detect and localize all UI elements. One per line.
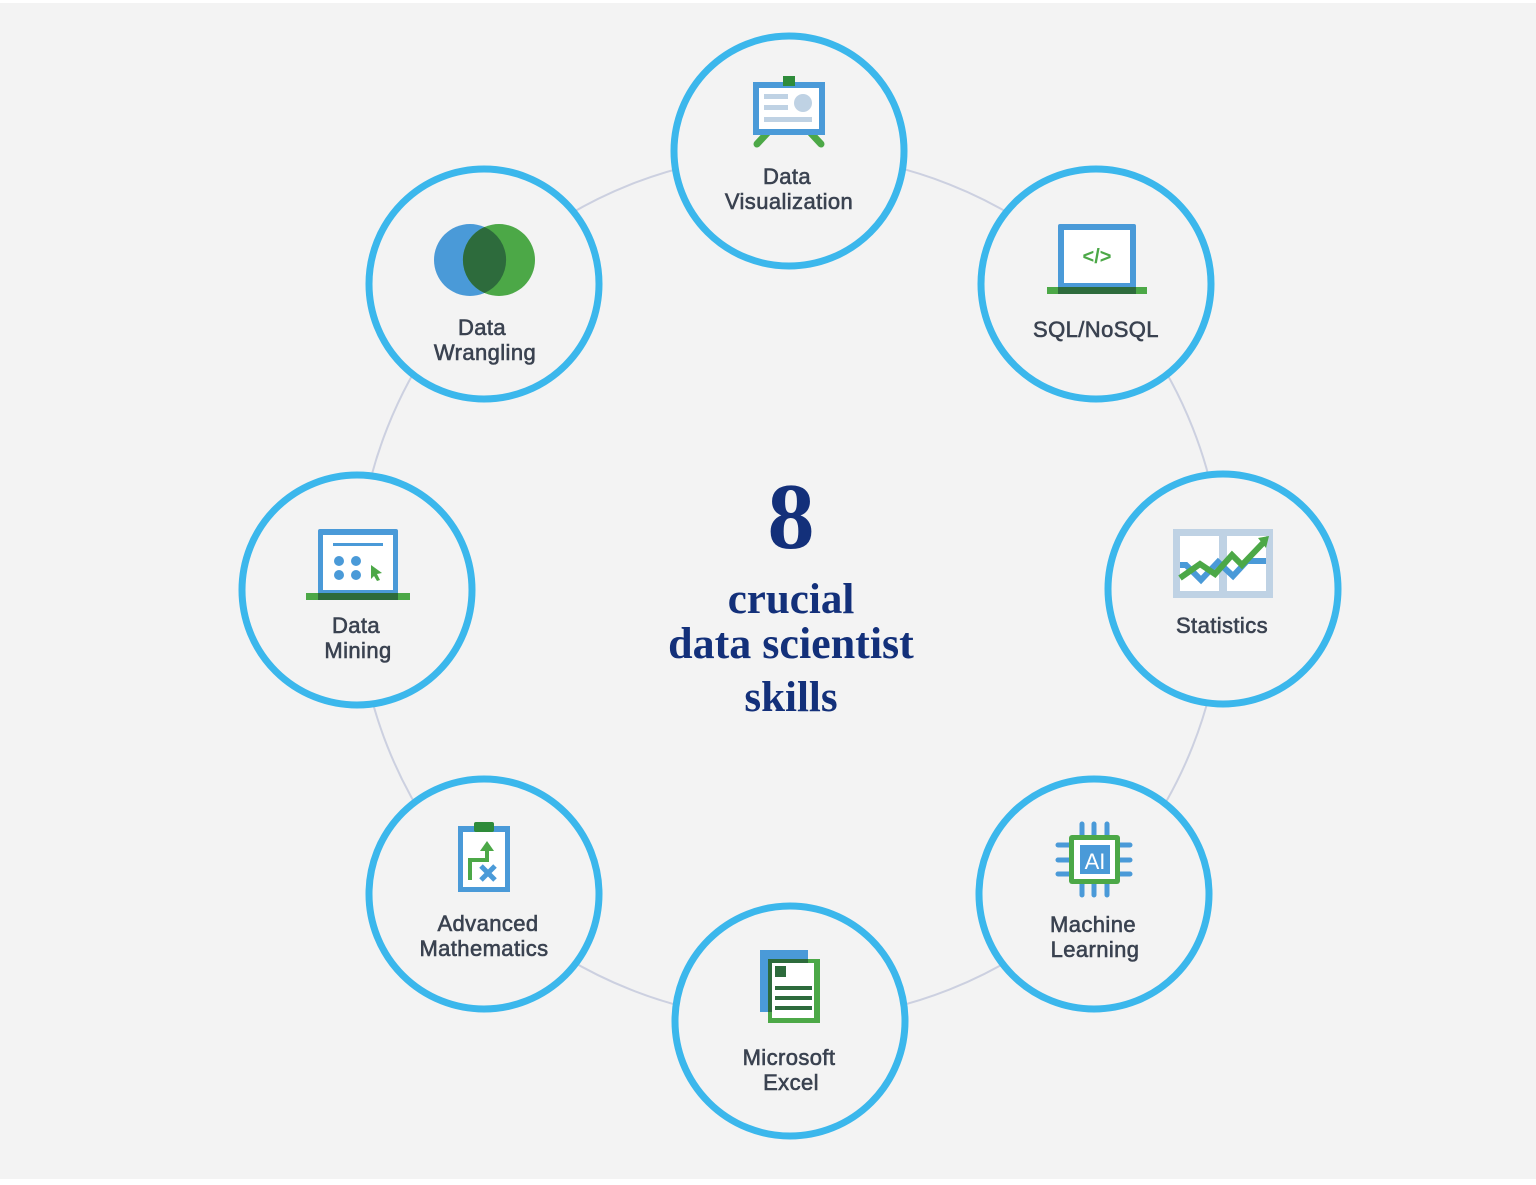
panel: statistics: Statistics — [1176, 613, 1268, 638]
icon: laptop dashboard — [306, 529, 410, 600]
title: data scientist — [668, 619, 914, 668]
title: 8 — [768, 465, 814, 569]
panel: data mining: Mining — [324, 638, 392, 663]
title — [668, 465, 914, 721]
panel: data visualization: Visualization — [725, 189, 853, 214]
panel: machine learning — [979, 779, 1209, 1009]
icon: AI chip: AI — [1085, 849, 1105, 874]
icon: presentation board — [753, 76, 825, 144]
panel: machine learning: Learning — [1051, 937, 1139, 962]
icon: spreadsheet — [760, 950, 820, 1023]
panel: advanced mathematics — [369, 779, 599, 1009]
icon: chart — [1173, 529, 1273, 598]
panel: data mining — [242, 475, 472, 705]
panel: data visualization — [674, 36, 904, 266]
panel: sql/nosql — [981, 169, 1211, 399]
panel: advanced mathematics: Mathematics — [419, 936, 549, 961]
panel: microsoft excel — [675, 906, 905, 1136]
panel: sql/nosql: SQL/NoSQL — [1033, 317, 1159, 342]
icon: AI chip — [1058, 824, 1130, 895]
panel: statistics — [1108, 474, 1338, 704]
title: crucial — [728, 576, 854, 623]
icon: clipboard — [458, 822, 510, 892]
icon: venn diagram — [434, 224, 535, 296]
panel: data visualization: Data — [763, 164, 811, 189]
panel: data wrangling: Data — [458, 315, 506, 340]
panel: advanced mathematics: Advanced — [437, 911, 539, 936]
panel: data mining: Data — [332, 613, 380, 638]
panel: data wrangling — [369, 169, 599, 399]
panel: machine learning: Machine — [1050, 912, 1136, 937]
panel: microsoft excel: Excel — [763, 1070, 819, 1095]
panel: microsoft excel: Microsoft — [743, 1045, 835, 1070]
icon: laptop code — [1047, 224, 1147, 294]
title: skills — [744, 674, 838, 721]
panel: data wrangling: Wrangling — [434, 340, 536, 365]
icon: laptop code: </> — [1083, 246, 1111, 268]
